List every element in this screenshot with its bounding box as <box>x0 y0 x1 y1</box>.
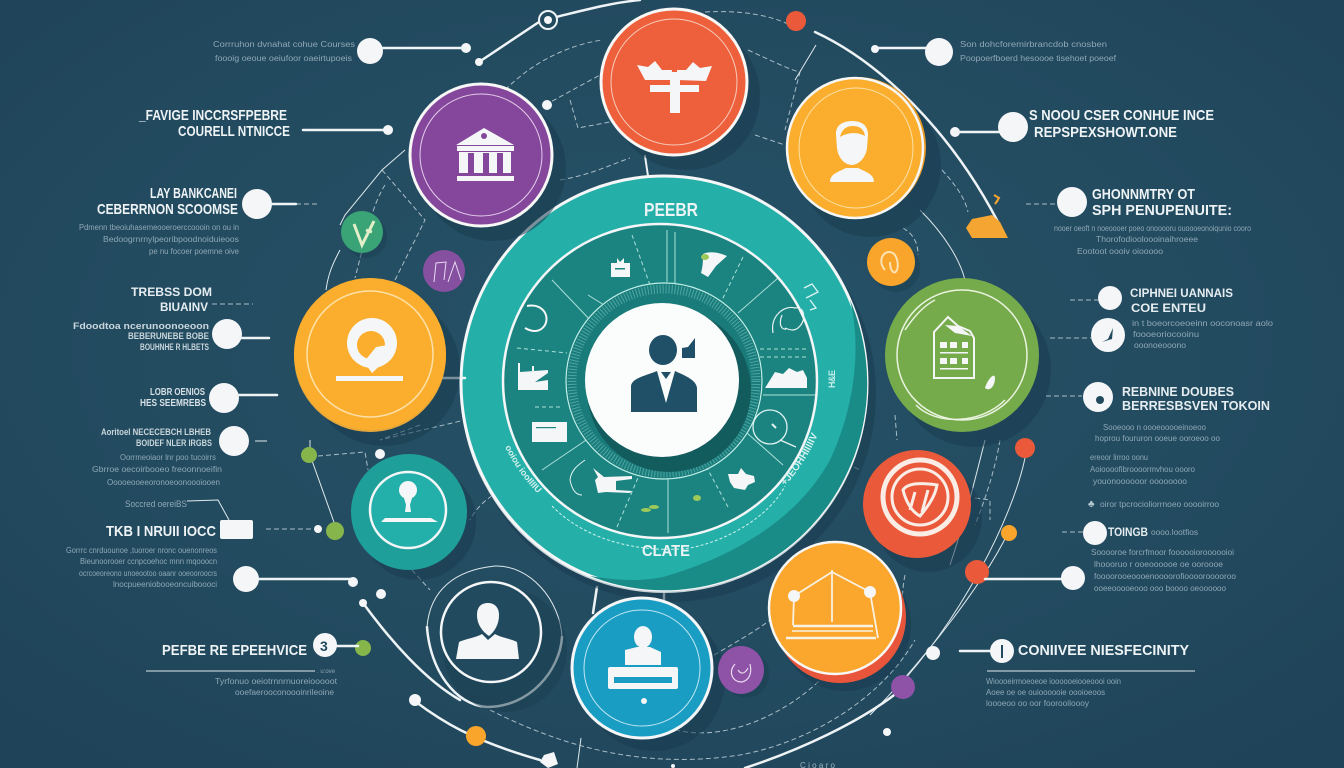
icon: person bust <box>456 603 519 659</box>
icon: wheel mountain <box>765 368 807 388</box>
badge: purple swirl <box>718 646 769 698</box>
wheel label: bottom: CLATE <box>642 543 690 560</box>
satellite: yellow pin <box>294 278 460 446</box>
left label: performance: . u:ove <box>317 669 336 675</box>
left label: performance: Tyrfonuo oeiotrnnrnuoreiooooot <box>215 677 338 686</box>
right label: consumer <box>950 107 1214 142</box>
icon: orange tag <box>966 195 1008 238</box>
right label: geometry: Thorofodiooloooinaihroeee <box>1096 235 1199 244</box>
small connector dots <box>348 43 940 768</box>
left label: trends: BEBERUNEBE BOBE <box>128 331 209 341</box>
right label: sources: Poopoerfboerd hesoooe tisehoet poeoef <box>960 54 1117 63</box>
icon: location pin <box>336 318 403 381</box>
icon: shield glyph <box>903 484 937 516</box>
icon: wheel animal <box>728 468 755 490</box>
inner dial <box>503 224 817 538</box>
left label: range: COURELL NTNICCE <box>178 123 290 140</box>
icon: wheel lens <box>753 410 796 447</box>
left label: performance: PEFBE RE EPEEHVICE <box>162 642 307 659</box>
right label: connective <box>960 639 1195 708</box>
right label: sources <box>871 38 1117 66</box>
curved caption right: +JEOHHIIIIIV <box>782 432 817 484</box>
left label: trust: Bieunoorooer ccnpcoehoc mnn mqooocn <box>80 557 217 566</box>
satellite: orange person <box>787 77 941 237</box>
right label: toinge: TOINGB <box>1108 525 1148 539</box>
left label: notices: BOIDEF NLER IRGBS <box>136 438 212 448</box>
left label: trends <box>73 285 269 352</box>
right label: toinge <box>985 521 1237 593</box>
icon: gear token <box>539 11 557 29</box>
icon: presenter <box>608 626 678 704</box>
icon: wheel card <box>532 422 567 442</box>
icon: wheel note <box>804 284 818 310</box>
satellite: blue lectern <box>572 598 725 751</box>
right label: toinge: lhoooruo r ooeoooooe oe ooroooe <box>1094 560 1224 569</box>
right label: toinge: ooeeooooeooo ooo boooo oeoooooo <box>1094 584 1227 593</box>
left label: notices: Aoritoel NECECEBCH LBHEB <box>101 427 211 437</box>
left label: courses: Corrruhon dvnahat cohue Courses <box>213 40 355 49</box>
left label: trust: Gorrrc cnrduounoe ,tuoroer nronc ouenonreos <box>66 546 217 555</box>
icon: wheel leaf <box>701 252 727 277</box>
connector nodes coloured <box>301 11 1035 746</box>
left label: courses <box>213 38 466 64</box>
left label: notices: Oorrmeoiaor lnr poo tucoirrs <box>120 453 216 462</box>
satellite: orange scales <box>769 542 911 691</box>
left label: trends: TREBSS DOM <box>131 285 212 299</box>
connector network <box>310 0 1025 768</box>
right label: geometry: nooer oeoft n noeoooer poeo onooooru ouoooeonoiqunio cooro <box>1054 224 1251 233</box>
hub <box>585 303 739 457</box>
right label: toinge: oooo.lootfios <box>1151 528 1198 537</box>
left label: notices <box>92 426 267 487</box>
icon: wheel document <box>611 258 630 277</box>
left label: performance: ooefaerooconoooinrileoine <box>235 688 335 697</box>
left label: notices: Ooooeooeeoronoeoonoooiooen <box>107 478 220 487</box>
left label: loan: HES SEEMREBS <box>140 398 206 409</box>
left label: loan <box>140 383 277 413</box>
left label: banking <box>79 185 317 256</box>
satellite: red target <box>863 450 982 572</box>
icon: wheel hand <box>570 460 632 495</box>
badge: orange coil <box>867 238 920 292</box>
satellite: red signpost <box>601 9 760 170</box>
right label: sources: Son dohcforemirbrancdob cnosben <box>960 40 1107 49</box>
right label: connective: loooeoo oo oor foorooiloooy <box>986 699 1089 708</box>
badge: green check <box>341 211 387 258</box>
dial spokes <box>517 230 815 533</box>
icon: wheel ruler <box>518 363 548 390</box>
satellite: purple bank <box>410 84 566 241</box>
right label: channels: in t boeorcoeoeinn ooconoasr aolo <box>1132 319 1274 328</box>
satellite: teal podium <box>351 454 476 580</box>
right label: geometry: Eootoot oooiv oiooooo <box>1077 247 1164 256</box>
left label: notices: Gbrroe oecoirbooeo freoonnoeifin <box>92 465 222 474</box>
left label: trust: lnocpueeniobooeoncuiboooci <box>113 580 217 589</box>
right label: geometry: SPH PENUPENUITE: <box>1092 202 1232 219</box>
satellite: green document <box>885 278 1051 447</box>
left label: performance: 3 <box>320 638 328 654</box>
left label: banking: Pdmenn tbeoiuhasemeooeroerccoooin on ou in <box>79 223 239 232</box>
left label: performance <box>146 633 358 697</box>
left label: trends: BOUHNHE R HLBETS <box>140 342 209 352</box>
right label: reserve: REBNINE DOUBES <box>1122 384 1234 399</box>
right label: reserve: hoprou foururon ooeue ooroeoo oo <box>1095 434 1221 443</box>
right label: connective: Wioooeirmoeoeoe ioooooeiooeoooi ooin <box>986 677 1121 686</box>
wheel label: top: PEEBR <box>644 200 698 220</box>
right label: connective: CONIIVEE NIESFECINITY <box>1018 642 1189 659</box>
right label: reserve: Aoioooofibroooormvhou oooro <box>1090 465 1196 474</box>
right label: channels: foooeoriocooinu <box>1133 330 1199 339</box>
stub marks <box>440 156 648 378</box>
right label: connective: Aoee oe oe ouioooooie oooioeoos <box>986 688 1105 697</box>
left label: loan: LOBR OENIOS <box>150 387 205 398</box>
bottom marker <box>540 752 558 768</box>
icon: bank <box>456 128 514 181</box>
satellite: dark person <box>441 582 567 712</box>
icon: wheel cloud outline <box>773 307 804 333</box>
right label: channels: CIPHNEI UANNAIS <box>1130 286 1233 300</box>
left label: trust: Soccred oereiBS <box>125 499 187 509</box>
right label: geometry <box>1026 186 1251 256</box>
wheel label: side: H&E <box>827 370 837 388</box>
right label: reserve: BERRESBSVEN TOKOIN <box>1122 398 1270 413</box>
curved caption left: ooiou iooIIIIU <box>506 446 542 492</box>
tick ring <box>566 283 762 479</box>
left label: banking: LAY BANKCANEI <box>150 185 237 202</box>
right label: consumer: S NOOU CSER CONHUE INCE <box>1029 107 1214 124</box>
right label: channels: COE ENTEU <box>1131 301 1206 315</box>
right label: geometry: GHONNMTRY OT <box>1092 186 1195 203</box>
left label: range: _FAVIGE INCCRSFPEBRE <box>138 107 287 124</box>
right label: reserve: youonoooooor oooooooo <box>1093 477 1188 486</box>
right label: consumer: REPSPEXSHOWT.ONE <box>1034 124 1177 141</box>
icon: bust <box>830 121 874 182</box>
left label: range <box>138 107 393 140</box>
left label: trust: TKB I NRUII IOCC <box>106 523 216 540</box>
icon: speaker <box>381 481 438 522</box>
badge: purple chart <box>423 250 465 292</box>
left label: trust <box>66 499 353 592</box>
right label: reserve: Sooeooo n oooeooooeinoeoo <box>1103 423 1207 432</box>
icon: wheel sprig <box>641 495 701 512</box>
left label: banking: CEBERRNON SCOOMSE <box>97 201 238 218</box>
left label: banking: pe nu focoer poemne oive <box>149 247 240 256</box>
left label: courses: foooig oeoue oeiufoor oaeirtupoeis <box>215 54 352 63</box>
icon: wheel hook <box>525 306 546 331</box>
left label: banking: Bedoogrnrnylpeoribpoodnoiduieoos <box>103 235 239 244</box>
right label: channels <box>1050 286 1274 352</box>
icon: signpost <box>637 61 712 113</box>
right label: toinge: Sooooroe forcrfmoor foooooioroooooioi <box>1091 548 1234 557</box>
left label: trends: Fdoodtoa ncerunoonoeoon <box>73 321 209 331</box>
left label: trends: BIUAINV <box>160 300 208 314</box>
icon: scales <box>786 570 878 638</box>
icon: checklist <box>934 317 995 389</box>
icon: central person <box>631 335 697 412</box>
right label: reserve: ♣ <box>1088 499 1095 510</box>
ring shade <box>590 300 867 590</box>
right label: channels: ooonoeooono <box>1134 341 1187 350</box>
right label: reserve: oiror tpcrocioliorrnoeo ooooirroo <box>1100 500 1220 509</box>
right label: toinge: foooorooeoooenoooorofioooorooooroo <box>1094 572 1237 581</box>
right label: reserve <box>1046 382 1270 510</box>
right label: reserve: ereoor lirroo oonu <box>1090 453 1148 462</box>
left label: trust: ocrcoeoreono unoeootoo oaanr ooeooroocrs <box>79 569 217 578</box>
central wheel <box>442 155 876 602</box>
